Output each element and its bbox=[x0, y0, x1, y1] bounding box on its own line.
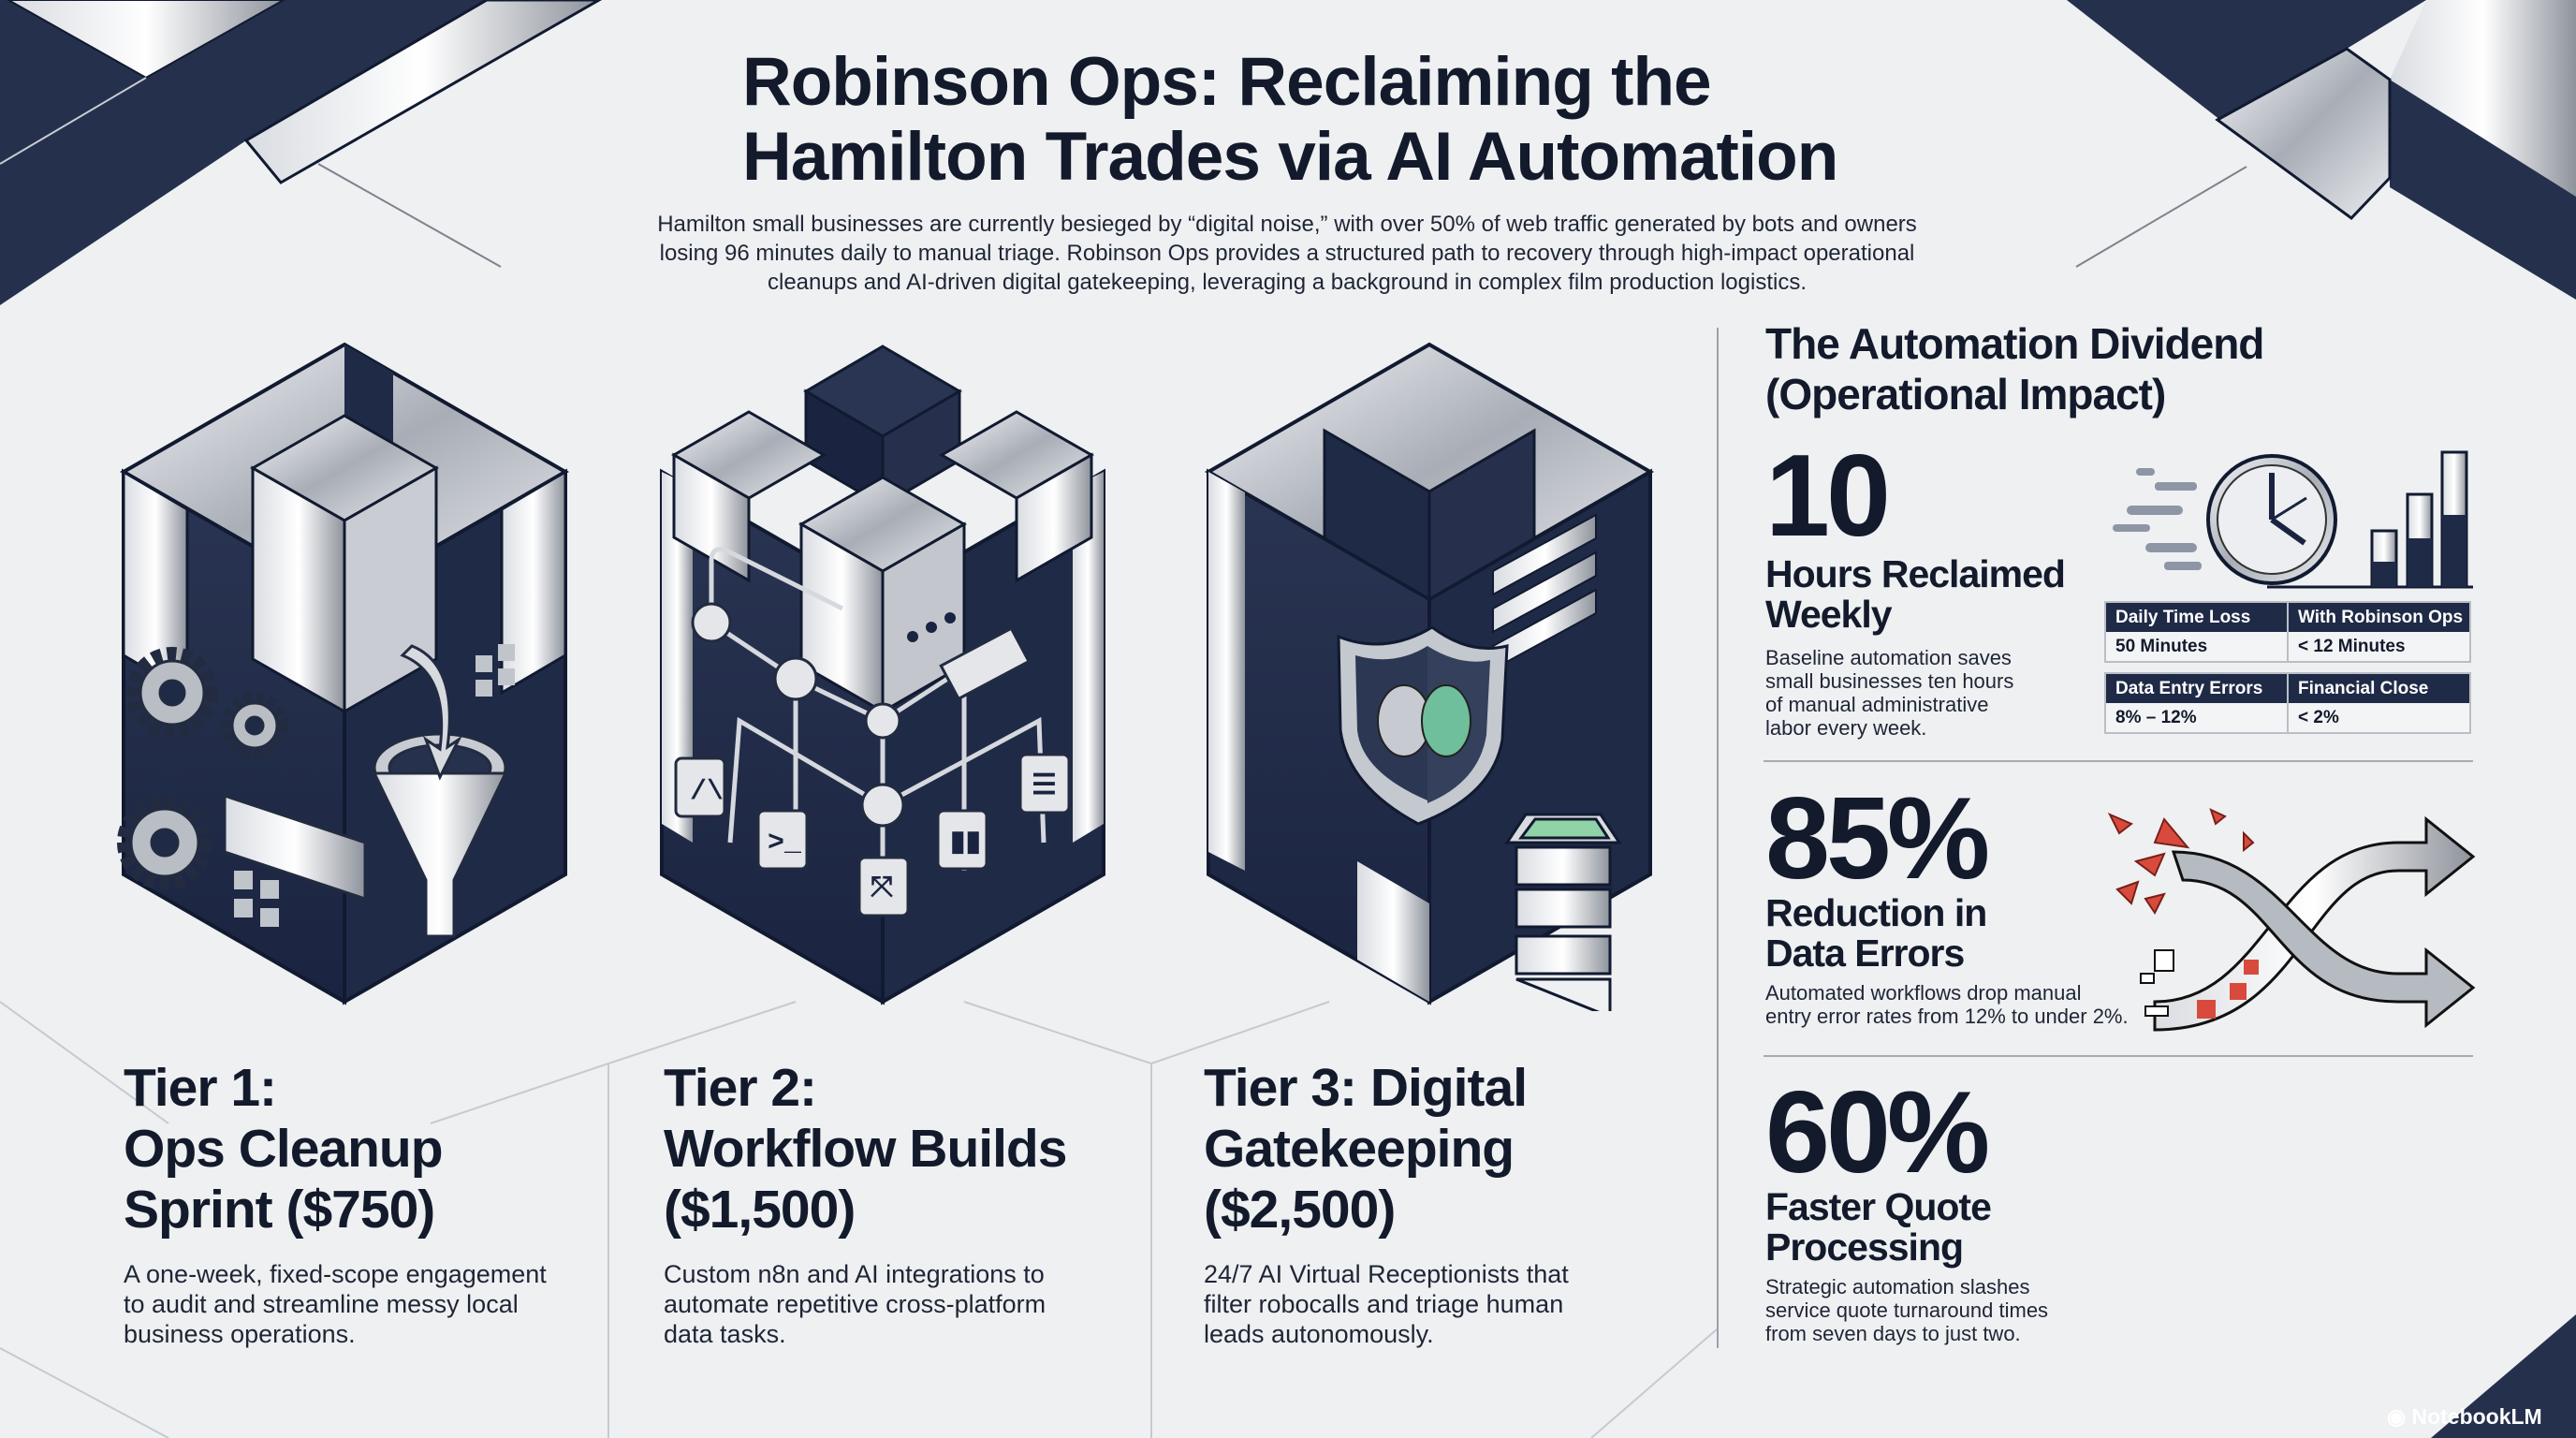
tier 3 heading: ($2,500) bbox=[1204, 1180, 1395, 1240]
table: time and errors bbox=[2104, 601, 2471, 734]
table: time and errors: < 2% bbox=[2298, 708, 2339, 726]
stat: 85% bbox=[1765, 774, 2129, 1028]
tier 1 description bbox=[124, 1260, 547, 1348]
intro text bbox=[657, 212, 1917, 295]
stat: 10 hours: Weekly bbox=[1765, 593, 1892, 636]
stat: 60%: Strategic automation slashes bbox=[1765, 1275, 2029, 1299]
icon: funnel bbox=[374, 646, 505, 936]
stat: 60%: 60% bbox=[1765, 1068, 1986, 1197]
tier 2 heading: Workflow Builds bbox=[664, 1119, 1066, 1179]
stat: 85%: entry error rates from 12% to under 2%. bbox=[1765, 1005, 2129, 1028]
icon: server stack bbox=[1507, 814, 1619, 1017]
stat: 10 hours: of manual administrative bbox=[1765, 693, 1988, 716]
icon: workflow nodes bbox=[711, 550, 1044, 889]
table: time and errors: < 12 Minutes bbox=[2298, 637, 2406, 655]
panel heading bbox=[1765, 319, 2263, 418]
intro text: losing 96 minutes daily to manual triage. Robinson Ops provides a structured path to recovery through high-impact operational bbox=[660, 241, 1914, 266]
tier 2 heading bbox=[664, 1058, 1066, 1240]
tier 2 description bbox=[664, 1260, 1046, 1348]
small cubes on top bbox=[674, 346, 1091, 712]
intro text: Hamilton small businesses are currently besieged by “digital noise,” with over 50% of web traffic generated by bots and owners bbox=[657, 212, 1917, 237]
tier 3 description: leads autonomously. bbox=[1204, 1320, 1434, 1348]
tier 1 description: business operations. bbox=[124, 1320, 356, 1348]
table: time and errors: Data Entry Errors bbox=[2115, 678, 2262, 698]
tier 2 description: Custom n8n and AI integrations to bbox=[664, 1260, 1045, 1288]
stat: 85%: Reduction in bbox=[1765, 891, 1986, 934]
tier 1 text bbox=[124, 1058, 547, 1348]
stat: 10 hours bbox=[1765, 432, 2065, 740]
tier 3 description: 24/7 AI Virtual Receptionists that bbox=[1204, 1260, 1569, 1288]
stat: 10 hours: labor every week. bbox=[1765, 716, 1926, 740]
stat: 85%: 85% bbox=[1765, 774, 1986, 903]
icon: gears bbox=[124, 653, 283, 884]
tier 3 heading: Tier 3: Digital bbox=[1204, 1058, 1527, 1118]
stat: 60%: Processing bbox=[1765, 1225, 1963, 1269]
logo: NotebookLM: ◉ NotebookLM bbox=[2387, 1404, 2542, 1429]
icon: clock and bars bbox=[2113, 451, 2473, 588]
tier 1 description: A one-week, fixed-scope engagement bbox=[124, 1260, 547, 1288]
table: time and errors: 8% – 12% bbox=[2115, 708, 2197, 726]
panel: automation dividend bbox=[1717, 328, 2486, 1348]
illustration: tier 2 workflow builds: ▮▮ bbox=[950, 828, 981, 859]
stat: 10 hours: small businesses ten hours bbox=[1765, 669, 2013, 693]
icon: shield with brain bbox=[1339, 627, 1507, 824]
title: Hamilton Trades via AI Automation bbox=[742, 119, 1837, 195]
stat: 10 hours: 10 bbox=[1765, 432, 1887, 561]
tier 3 heading bbox=[1204, 1058, 1527, 1240]
tier 2 heading: Tier 2: bbox=[664, 1058, 816, 1118]
stat: 60%: service quote turnaround times bbox=[1765, 1299, 2048, 1322]
stat: 60%: from seven days to just two. bbox=[1765, 1322, 2021, 1345]
illustration: tier 3 digital gatekeeping bbox=[1205, 343, 1654, 1011]
tier 1 heading bbox=[124, 1058, 443, 1240]
illustration: tier 2 workflow builds: ☰ bbox=[1032, 771, 1057, 803]
stat: 85%: Automated workflows drop manual bbox=[1765, 981, 2082, 1005]
table: time and errors: Financial Close bbox=[2298, 678, 2428, 698]
title: Robinson Ops: Reclaiming the bbox=[742, 44, 1711, 120]
illustration: tier 2 workflow builds bbox=[660, 345, 1105, 1005]
title bbox=[742, 44, 1837, 195]
tier 2 description: automate repetitive cross-platform bbox=[664, 1290, 1046, 1318]
table: time and errors: Daily Time Loss bbox=[2115, 607, 2250, 627]
stat: 10 hours: Baseline automation saves bbox=[1765, 646, 2012, 669]
tier 1 heading: Ops Cleanup bbox=[124, 1119, 443, 1179]
tier 3 description bbox=[1204, 1260, 1569, 1348]
stat: 60%: Faster Quote bbox=[1765, 1185, 1991, 1228]
panel heading: (Operational Impact) bbox=[1765, 370, 2165, 418]
tier 3 description: filter robocalls and triage human bbox=[1204, 1290, 1563, 1318]
tier 3 heading: Gatekeeping bbox=[1204, 1119, 1514, 1179]
table: time and errors: 50 Minutes bbox=[2115, 637, 2207, 655]
icon: crossing arrows bbox=[2108, 808, 2475, 1032]
tier 2 text bbox=[664, 1058, 1066, 1348]
illustration: tier 2 workflow builds: >_ bbox=[768, 828, 802, 859]
panel heading: The Automation Dividend bbox=[1765, 319, 2263, 368]
tier 2 heading: ($1,500) bbox=[664, 1180, 855, 1240]
tier 2 description: data tasks. bbox=[664, 1320, 786, 1348]
stat: 85%: Data Errors bbox=[1765, 932, 1964, 975]
tier 3 text bbox=[1204, 1058, 1569, 1348]
illustration: tier 2 workflow builds: ⤧ bbox=[871, 873, 893, 905]
stat: 10 hours: Hours Reclaimed bbox=[1765, 552, 2065, 595]
illustration: tier 1 ops cleanup bbox=[117, 343, 569, 1005]
tier 1 description: to audit and streamline messy local bbox=[124, 1290, 519, 1318]
stat: 60% bbox=[1765, 1068, 2048, 1345]
intro text: cleanups and AI-driven digital gatekeeping, leveraging a background in complex film production logistics. bbox=[768, 270, 1807, 295]
tier 1 heading: Tier 1: bbox=[124, 1058, 276, 1118]
illustration: tier 2 workflow builds: /\ bbox=[690, 776, 724, 808]
table: time and errors: With Robinson Ops bbox=[2298, 607, 2463, 627]
tier 1 heading: Sprint ($750) bbox=[124, 1180, 434, 1240]
